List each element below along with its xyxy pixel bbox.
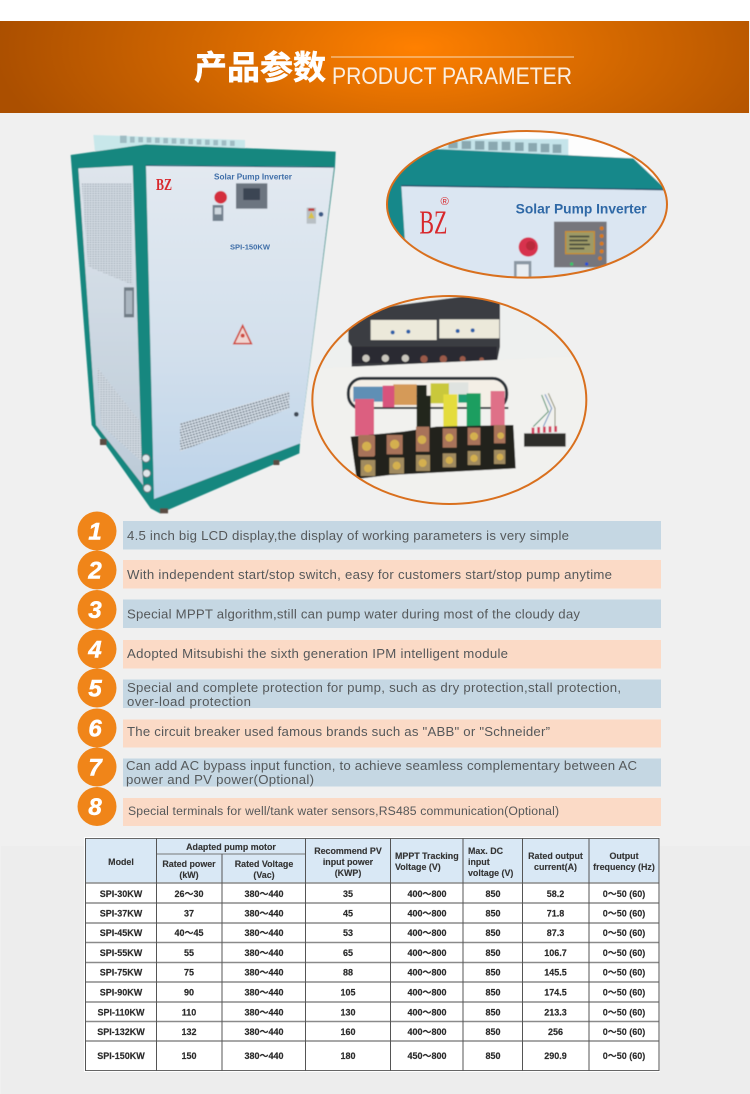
table header: frequency (Hz) [593,862,655,872]
row: SPI-37KW: 71.8 [547,908,564,918]
table header [85,838,659,883]
row: SPI-90KW: 0～50 (60) [603,988,645,998]
row: SPI-37KW: 45 [343,908,353,918]
feature 8: 8 [88,794,102,821]
feature 3 [78,590,661,629]
feature 5: 5 [88,676,102,702]
row: SPI-30KW: 0～50 (60) [603,889,645,899]
product photo: solar pump inverter cabinet [71,135,336,513]
table header: MPPT Tracking [395,851,459,861]
row: SPI-55KW: 400～800 [407,948,447,958]
feature 4 [78,630,661,668]
table header: Max. DC [468,846,504,856]
feature 7: Can add AC bypass input function, to achieve seamless complementary between AC [126,758,637,773]
row: SPI-90KW: 105 [340,988,356,998]
HMI screen [236,183,267,209]
row: SPI-37KW: 37 [184,908,194,918]
row: SPI-90KW: SPI-90KW [100,988,143,998]
parameter table [84,837,660,1072]
feature 5: Special and complete protection for pump, such as dry protection,stall protection, [127,680,621,695]
row: SPI-75KW: 75 [184,968,194,978]
table header: (kW) [179,870,199,880]
feature 1 [78,512,661,550]
heading: Chinese title: 产品参数 [194,49,326,86]
row: SPI-55KW: 850 [485,948,501,958]
detail callout: control panel [387,130,668,279]
row: SPI-55KW: 106.7 [544,948,567,958]
radiator [440,139,568,156]
row: SPI-90KW: 400～800 [407,988,447,998]
table header: Rated Voltage [235,859,293,869]
brand logo: BZ [419,204,447,241]
row: SPI-150KW: 180 [340,1051,356,1061]
side panel [78,166,149,493]
row: SPI-132KW: SPI-132KW [97,1027,145,1037]
row: SPI-90KW: 850 [485,988,501,998]
row: SPI-150KW: SPI-150KW [97,1051,145,1061]
copper bars [383,386,394,407]
radiator on top [93,135,245,152]
row: SPI-132KW: 400～800 [407,1027,447,1037]
feature 2: With independent start/stop switch, easy for customers start/stop pump anytime [127,567,612,582]
table header: Rated output [528,851,583,861]
row: SPI-45KW [100,928,645,938]
row: SPI-55KW: 55 [184,948,194,958]
row: SPI-132KW: 256 [548,1027,563,1037]
front brand logo: BZ [156,175,172,194]
row: SPI-90KW: 174.5 [544,988,567,998]
cable window [348,378,507,409]
warning label [307,208,316,224]
feature 7: 7 [88,754,103,782]
feature 7 [78,748,661,787]
breakers [348,292,500,367]
feature 2: 2 [87,558,102,584]
row: SPI-45KW: 0～50 (60) [603,928,645,938]
HMI [554,222,607,267]
white plate [352,359,498,368]
row: SPI-55KW: 380～440 [244,948,284,958]
row: SPI-45KW: 40～45 [174,928,204,938]
row: SPI-150KW: 450～800 [407,1051,447,1061]
front label text: Solar Pump Inverter [214,172,292,181]
row: SPI-75KW: 0～50 (60) [603,968,645,978]
row: SPI-150KW: 850 [485,1051,501,1061]
feature 3: 3 [88,597,102,624]
row: SPI-90KW [100,988,645,998]
row: SPI-30KW: 850 [485,889,501,899]
feature list [78,512,661,826]
row: SPI-110KW: 850 [485,1008,501,1018]
teal frame [388,148,666,240]
feature 5: over-load protection [127,694,251,709]
feature 2 [78,550,661,590]
feature 4: Adopted Mitsubishi the sixth generation IPM intelligent module [127,646,508,661]
row: SPI-150KW: 150 [181,1051,197,1061]
table header: Model [108,857,134,867]
model label: SPI-150KW [230,244,270,251]
registered mark: ® [440,196,449,208]
row: SPI-55KW: SPI-55KW [100,948,143,958]
feature 4: 4 [87,636,102,664]
feet [100,439,279,513]
row: SPI-75KW: 145.5 [544,968,567,978]
row: SPI-75KW: 380～440 [244,968,284,978]
row: SPI-75KW: 88 [343,968,353,978]
cabinet frame [71,144,336,513]
row: SPI-90KW: 380～440 [244,988,284,998]
table header: input [468,857,490,867]
row: SPI-30KW: 26～30 [174,889,204,899]
feature 7: power and PV power(Optional) [126,772,314,787]
row: SPI-45KW: 53 [343,928,353,938]
row: SPI-45KW: 380～440 [244,928,284,938]
row: SPI-55KW [100,948,645,958]
row: SPI-45KW: 400～800 [407,928,447,938]
row: SPI-150KW: 0～50 (60) [603,1051,645,1061]
row: SPI-37KW: 400～800 [407,908,447,918]
small terminal strip [524,433,566,447]
row: SPI-75KW [100,968,645,978]
lower background band [1,846,750,1094]
feature 8 [78,787,661,826]
row: SPI-110KW: 400～800 [407,1008,447,1018]
row: SPI-90KW: 90 [184,988,194,998]
row: SPI-30KW: 380～440 [244,889,284,899]
row: SPI-150KW: 290.9 [544,1051,567,1061]
row: SPI-132KW: 850 [485,1027,501,1037]
feature 8: Special terminals for well/tank water sensors,RS485 communication(Optional) [128,804,559,818]
table header: (KWP) [335,868,361,878]
table grid [85,838,659,1071]
row: SPI-110KW: 380～440 [244,1008,284,1018]
row: SPI-45KW: 87.3 [547,928,564,938]
table header: Voltage (V) [395,862,441,872]
table header: input power [323,857,374,867]
row: SPI-30KW: 58.2 [547,889,564,899]
table header: Recommend PV [314,846,382,856]
label text: Solar Pump Inverter [516,201,647,216]
row: SPI-37KW: 380～440 [244,908,284,918]
feature 3: Special MPPT algorithm,still can pump water during most of the cloudy day [127,606,580,622]
row: SPI-150KW: 380～440 [244,1051,284,1061]
banner [0,21,749,113]
row: SPI-110KW: 110 [182,1008,196,1018]
row: SPI-37KW: 0～50 (60) [603,908,645,918]
feature 1: 4.5 inch big LCD display,the display of working parameters is very simple [127,528,569,543]
row: SPI-110KW: 0～50 (60) [603,1008,645,1018]
row: SPI-45KW: SPI-45KW [100,928,143,938]
row: SPI-37KW: 850 [485,908,501,918]
row: SPI-75KW: 400～800 [407,968,447,978]
row: SPI-110KW: SPI-110KW [97,1008,145,1018]
row: SPI-55KW: 65 [343,948,353,958]
row: SPI-30KW: SPI-30KW [100,889,143,899]
row: SPI-150KW [97,1051,645,1061]
heading: English title: PRODUCT PARAMETER [332,63,572,90]
panel [401,186,667,278]
detail callout: breakers and terminals [310,292,588,507]
row: SPI-75KW: 850 [485,968,501,978]
feature 6: The circuit breaker used famous brands such as "ABB" or "Schneider” [127,724,550,739]
table header: voltage (V) [468,868,513,878]
row: SPI-132KW: 160 [340,1027,356,1037]
table header: Output [609,851,639,861]
row: SPI-132KW [97,1027,645,1037]
row: SPI-75KW: SPI-75KW [100,968,143,978]
table header: current(A) [534,862,577,872]
row: SPI-132KW: 380～440 [244,1027,284,1037]
row: SPI-30KW: 400～800 [407,889,447,899]
feature 5 [78,668,661,709]
table header: (Vac) [253,870,275,880]
cable glands [142,454,151,492]
feature 6 [78,708,661,748]
row: SPI-55KW: 0～50 (60) [603,948,645,958]
table header: Rated power [162,859,216,869]
row: SPI-30KW: 35 [343,889,353,899]
row: SPI-110KW: 213.3 [544,1008,567,1018]
row: SPI-132KW: 132 [181,1027,197,1037]
emergency stop [214,191,227,204]
row: SPI-110KW [97,1008,645,1018]
row: SPI-132KW: 0～50 (60) [603,1027,645,1037]
feature 1: 1 [88,518,102,546]
stop button [519,237,538,257]
row: SPI-37KW: SPI-37KW [100,908,143,918]
row: SPI-37KW [100,908,645,918]
terminal block [351,425,516,479]
row: SPI-45KW: 850 [485,928,501,938]
top white strip [0,0,750,21]
row: SPI-30KW [100,889,645,899]
row: SPI-110KW: 130 [340,1008,356,1018]
feature 6: 6 [88,716,102,742]
table header: Adapted pump motor [186,842,276,852]
front vent [180,391,289,452]
warning triangle [234,326,251,344]
front panel [146,165,334,499]
